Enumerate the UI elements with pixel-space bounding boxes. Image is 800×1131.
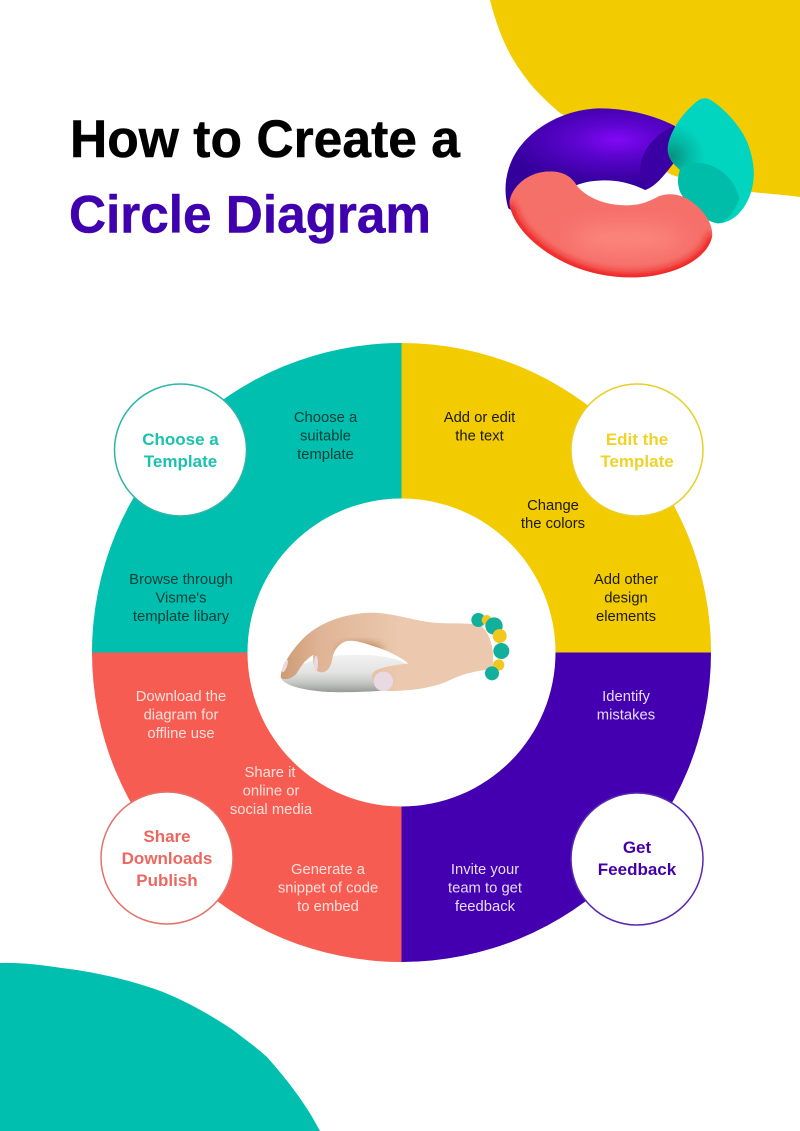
yellow segment labels: Add or edit bbox=[444, 410, 515, 426]
red segment labels: Download the bbox=[136, 689, 226, 705]
purple segment labels: mistakes bbox=[597, 708, 655, 724]
callout: Choose a Template: Template bbox=[144, 452, 217, 471]
red segment labels: diagram for bbox=[144, 708, 218, 724]
yellow segment labels: Add other bbox=[594, 572, 658, 588]
teal segment labels: Choose a bbox=[294, 410, 358, 426]
segment: yellow bbox=[402, 343, 711, 652]
yellow segment labels bbox=[444, 410, 658, 625]
bracelet bbox=[471, 613, 509, 680]
segment: red bbox=[92, 652, 402, 962]
illustration: 3D donut chart bbox=[500, 98, 754, 283]
segment: teal bbox=[92, 343, 402, 652]
callout: Edit the Template: Template bbox=[600, 452, 674, 471]
callout: Share Downloads Publish: Share bbox=[143, 827, 191, 846]
red lower edge shade bbox=[509, 203, 712, 277]
purple segment labels: Invite your bbox=[451, 862, 519, 878]
red segment labels bbox=[136, 689, 378, 915]
purple segment labels: team to get bbox=[448, 880, 522, 896]
callout: Get Feedback: Get bbox=[623, 838, 652, 857]
callout: Get Feedback: Feedback bbox=[598, 860, 677, 879]
callout: Choose a Template: Choose a bbox=[142, 430, 219, 449]
yellow segment labels: elements bbox=[596, 609, 656, 625]
finger nails bbox=[281, 656, 318, 673]
yellow segment labels: design bbox=[604, 590, 648, 606]
purple segment labels: Identify bbox=[602, 689, 650, 705]
red segment labels: to embed bbox=[297, 899, 359, 915]
mouse bbox=[281, 655, 408, 692]
donut red segment bbox=[509, 171, 712, 278]
red segment labels: social media bbox=[230, 802, 313, 818]
callout: Share Downloads Publish: Downloads bbox=[122, 849, 212, 868]
donut teal segment bbox=[668, 98, 754, 223]
teal segment labels: Visme's bbox=[155, 590, 207, 606]
purple segment labels bbox=[448, 689, 655, 915]
circle diagram bbox=[92, 343, 711, 962]
callout: Get Feedback bbox=[571, 793, 703, 925]
red segment labels: snippet of code bbox=[278, 880, 378, 896]
teal segment labels bbox=[129, 410, 358, 625]
donut purple segment bbox=[506, 108, 675, 213]
red highlight bbox=[570, 225, 683, 252]
callout: Edit the Template bbox=[571, 384, 703, 516]
background blob: teal bottom left bbox=[0, 963, 320, 1131]
teal segment labels: template bbox=[297, 447, 354, 463]
red segment labels: Share it bbox=[244, 765, 296, 781]
thumb nail bbox=[374, 672, 393, 691]
yellow segment labels: Change bbox=[527, 498, 579, 514]
red segment labels: offline use bbox=[147, 726, 215, 742]
yellow segment labels: the colors bbox=[521, 516, 585, 532]
callout: Choose a Template bbox=[114, 384, 246, 516]
teal segment labels: Browse through bbox=[129, 572, 233, 588]
callout: Share Downloads Publish: Publish bbox=[136, 871, 198, 890]
hand bbox=[280, 612, 494, 691]
illustration: hand on mouse bbox=[280, 612, 510, 692]
title bbox=[69, 110, 461, 244]
title: How to Create a bbox=[70, 110, 461, 169]
red segment labels: Generate a bbox=[291, 862, 366, 878]
donut teal cut face bbox=[678, 163, 739, 223]
title: Circle Diagram bbox=[69, 186, 431, 244]
donut purple inner shade bbox=[640, 126, 675, 190]
teal segment labels: suitable bbox=[300, 428, 351, 444]
yellow segment labels: the text bbox=[455, 428, 504, 444]
background blob: yellow top right bbox=[490, 0, 800, 197]
segment: purple bbox=[402, 652, 711, 962]
red segment labels: online or bbox=[243, 784, 299, 800]
callout: Edit the Template: Edit the bbox=[606, 430, 668, 449]
purple segment labels: feedback bbox=[455, 899, 516, 915]
palm shadow bbox=[337, 642, 383, 657]
callout: Share Downloads Publish bbox=[101, 792, 233, 924]
teal segment labels: template libary bbox=[133, 609, 230, 625]
